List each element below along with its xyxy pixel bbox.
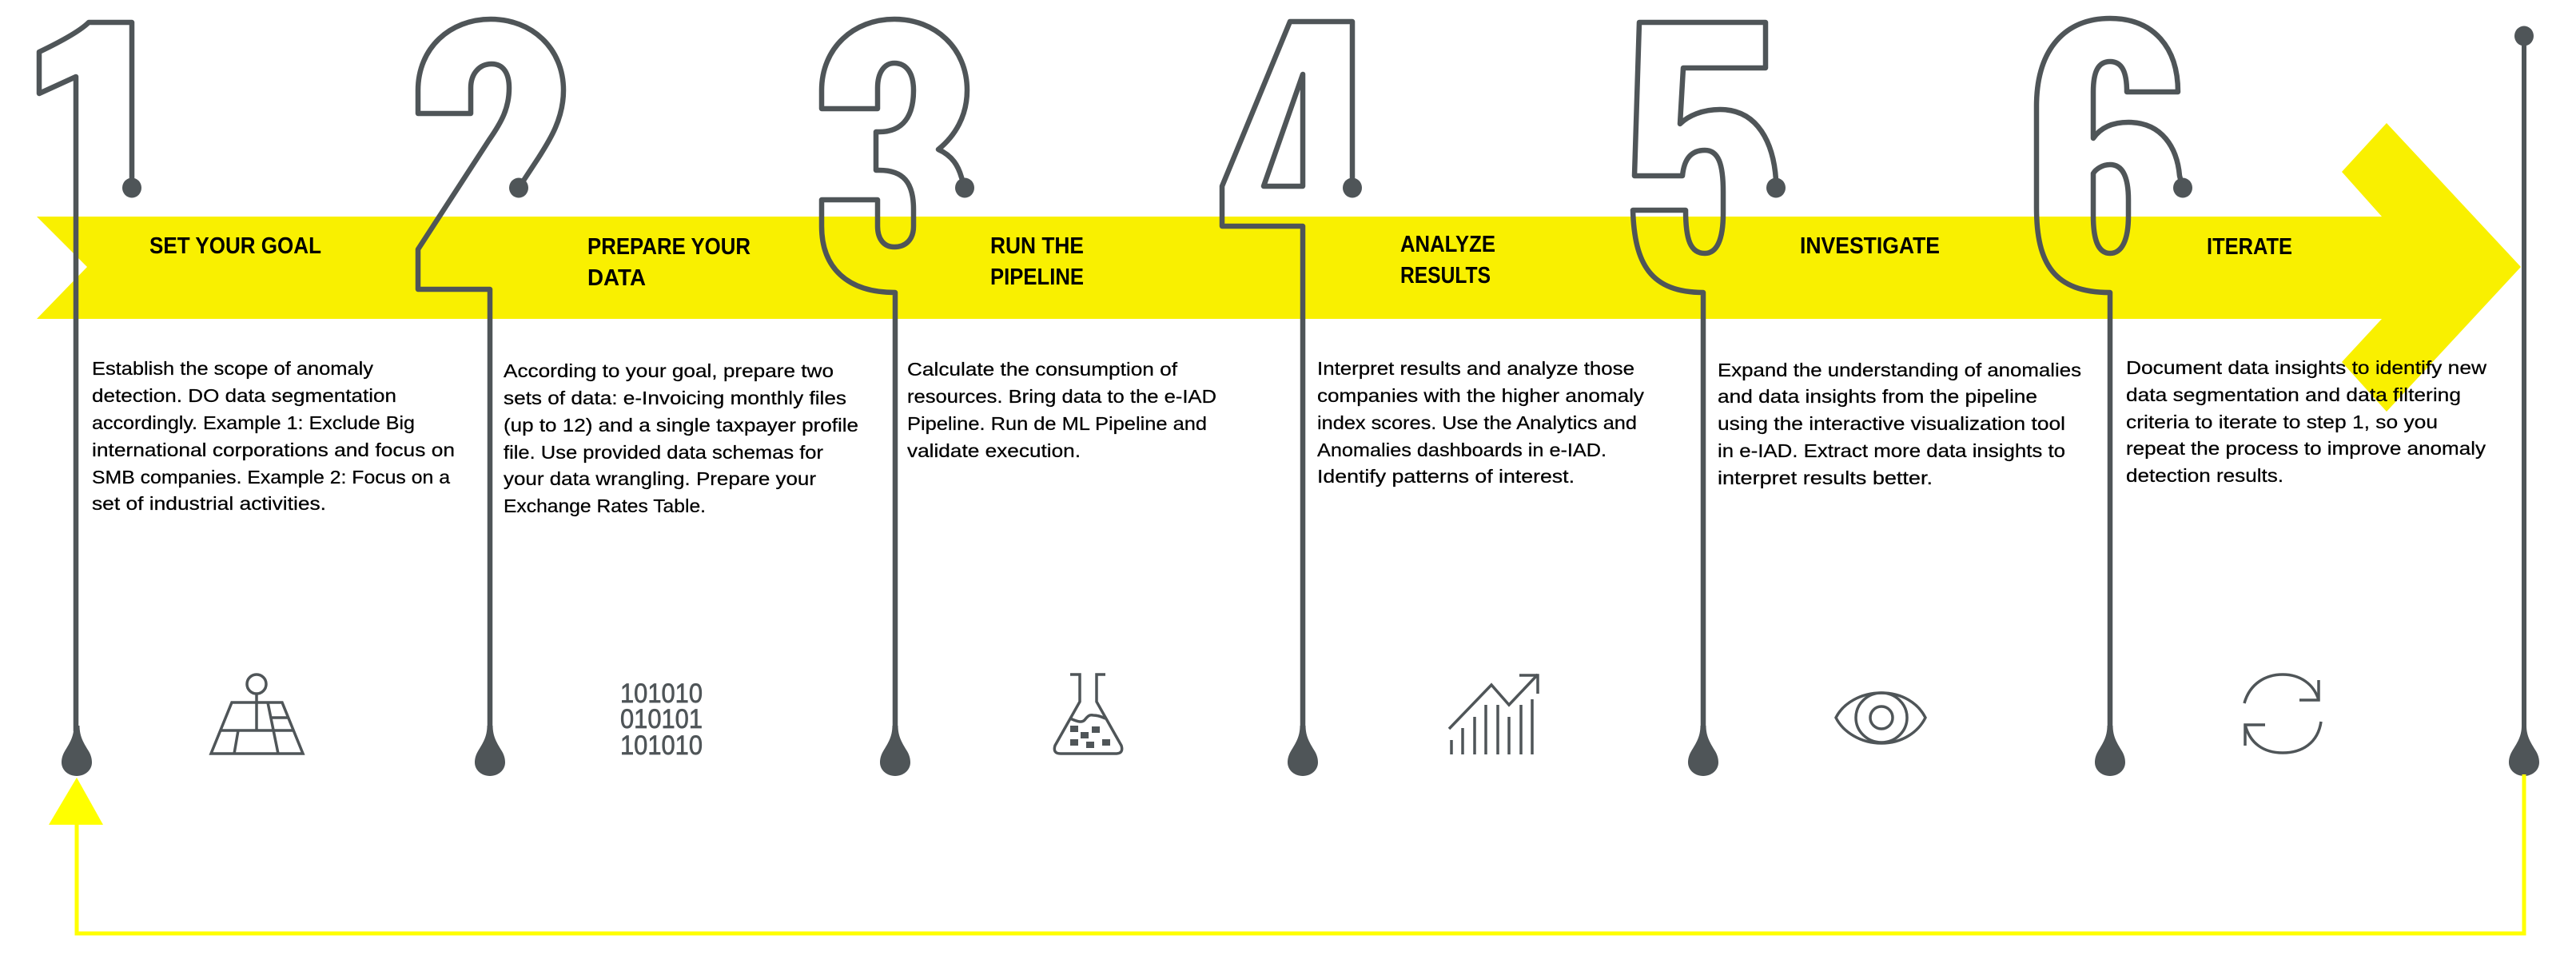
body text: step 2: your data wrangling. Prepare your — [504, 468, 816, 489]
icon: eye — [1836, 693, 1925, 743]
body text: step 5: Expand the understanding of anomalies — [1718, 360, 2081, 380]
heading: investigate: INVESTIGATE — [1800, 233, 1940, 259]
body text: step 3 — [907, 359, 1216, 461]
numeral 3 with connector — [822, 19, 974, 776]
body text: step 1: detection. DO data segmentation — [92, 385, 396, 406]
body text: step 6: detection results. — [2126, 465, 2283, 486]
body text: step 2: file. Use provided data schemas for — [504, 442, 823, 463]
body text: step 2: According to your goal, prepare two — [504, 360, 834, 381]
body text: step 5: using the interactive visualization tool — [1718, 413, 2065, 434]
heading: set your goal: SET YOUR GOAL — [149, 233, 321, 259]
numeral 4 with connector — [1222, 22, 1362, 776]
heading: prepare your data: PREPARE YOUR — [587, 234, 751, 260]
body text: step 4: Anomalies dashboards in e-IAD. — [1317, 440, 1607, 460]
body text: step 2 — [504, 360, 858, 516]
numeral 5 with connector — [1633, 22, 1786, 776]
body text: step 2: Exchange Rates Table. — [504, 495, 706, 516]
heading: prepare your data — [587, 234, 751, 291]
body text: step 4: companies with the higher anomaly — [1317, 385, 1645, 406]
heading: prepare your data: DATA — [587, 265, 646, 291]
body text: step 6: data segmentation and data filtering — [2126, 384, 2461, 405]
body text: step 6 — [2126, 357, 2486, 486]
yellow process arrow — [37, 123, 2521, 412]
icon: rising chart — [1449, 674, 1538, 754]
body text: step 5: and data insights from the pipeline — [1718, 386, 2037, 407]
body text: step 3: Calculate the consumption of — [907, 359, 1178, 380]
body text: step 1: SMB companies. Example 2: Focus on a — [92, 467, 450, 487]
closing vertical connector — [2509, 26, 2539, 776]
numeral 2 with connector — [418, 19, 563, 776]
body text: step 2: sets of data: e-Invoicing monthly files — [504, 388, 846, 408]
body text: step 6: criteria to iterate to step 1, so you — [2126, 412, 2438, 432]
body text: step 1: set of industrial activities. — [92, 493, 326, 514]
body text: step 5 — [1718, 360, 2081, 488]
body text: step 2: (up to 12) and a single taxpayer profile — [504, 415, 858, 436]
body text: step 3: Pipeline. Run de ML Pipeline and — [907, 413, 1207, 434]
body text: step 4: Identify patterns of interest. — [1317, 466, 1575, 487]
feedback loop arrow back to step 1 — [49, 774, 2524, 933]
body text: step 4 — [1317, 358, 1645, 487]
body text: step 5: in e-IAD. Extract more data insights to — [1718, 440, 2065, 461]
heading: run the pipeline: PIPELINE — [990, 265, 1084, 290]
heading: analyze results: ANALYZE — [1400, 232, 1495, 257]
body text: step 1: international corporations and focus on — [92, 440, 455, 460]
heading: analyze results: RESULTS — [1400, 263, 1491, 288]
body text: step 3: resources. Bring data to the e-IAD — [907, 386, 1216, 407]
icon: binary digits: 101010 — [620, 730, 703, 761]
heading: run the pipeline: RUN THE — [990, 233, 1084, 259]
body text: step 6: repeat the process to improve anomaly — [2126, 438, 2486, 459]
body text: step 1: Establish the scope of anomaly — [92, 358, 374, 379]
numeral 1 with connector — [39, 22, 141, 776]
body text: step 4: index scores. Use the Analytics and — [1317, 412, 1637, 433]
numeral 6 with connector — [2037, 18, 2192, 776]
heading: analyze results — [1400, 232, 1495, 288]
icon: lab flask — [1054, 674, 1122, 754]
heading: run the pipeline — [990, 233, 1084, 290]
icon: binary digits: 010101 — [620, 704, 703, 734]
body text: step 5: interpret results better. — [1718, 468, 1933, 488]
body text: step 4: Interpret results and analyze those — [1317, 358, 1634, 379]
icon: binary digits — [620, 678, 703, 761]
icon: refresh arrows — [2244, 674, 2321, 753]
icon: map with pin — [211, 674, 303, 754]
body text: step 1: accordingly. Example 1: Exclude Big — [92, 412, 415, 433]
body text: step 1 — [92, 358, 455, 514]
body text: step 6: Document data insights to identify new — [2126, 357, 2486, 378]
icon: binary digits: 101010 — [620, 678, 703, 709]
body text: step 3: validate execution. — [907, 440, 1081, 461]
heading: iterate: ITERATE — [2207, 234, 2292, 260]
